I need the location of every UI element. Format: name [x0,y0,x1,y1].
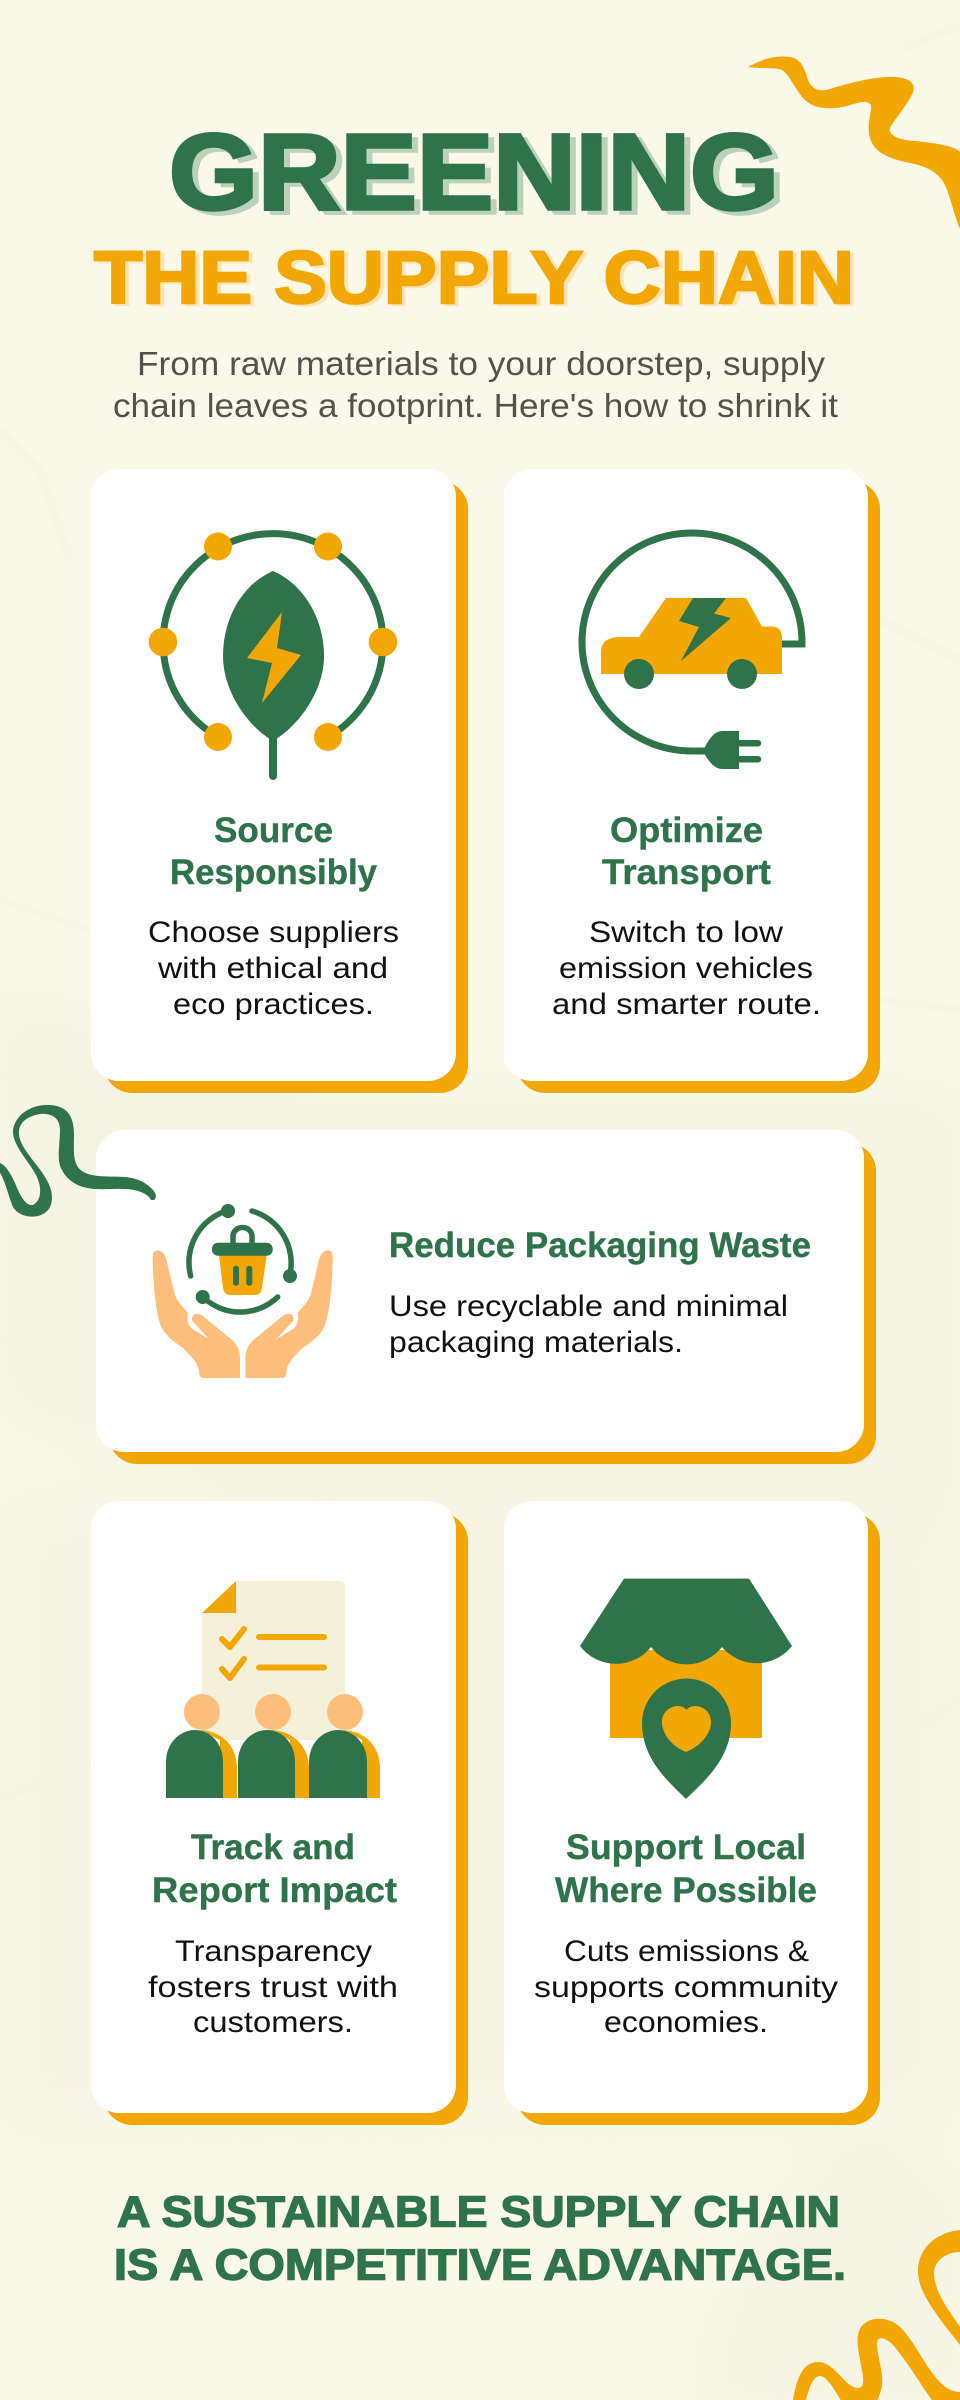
heading: source responsibly: Source [214,811,333,850]
text: support local: supports community [534,1971,838,2004]
heading: optimize transport: Transport [602,853,771,892]
text: optimize transport: and smarter route. [552,988,821,1021]
heading: track and report impact: Report Impact [152,1871,397,1910]
text: reduce packaging waste: packaging materials. [389,1326,683,1359]
closing statement: A SUSTAINABLE SUPPLY CHAIN [117,2188,840,2236]
heading: track and report impact: Track and [191,1828,355,1867]
heading: support local [555,1828,817,1910]
icon: hands holding recycling bin [153,1204,333,1378]
squiggle: top right orange [748,57,960,229]
text: support local: Cuts emissions & [564,1935,809,1968]
text: source responsibly: Choose suppliers [148,916,399,949]
text: support local [534,1935,838,2039]
panel: optimize transport [504,469,880,1093]
squiggles: bottom right orange [793,2230,960,2400]
subtitle [113,345,838,424]
heading: source responsibly: Responsibly [170,853,378,892]
title: GREENING [175,115,785,236]
subtitle: From raw materials to your doorstep, supply [137,345,826,382]
title: THE SUPPLY CHAIN [94,236,854,319]
text: optimize transport [552,916,821,1021]
heading: optimize transport [602,811,771,892]
text: source responsibly [148,916,399,1021]
icon: report with people [166,1581,380,1798]
heading: reduce packaging waste: Reduce Packaging Waste [389,1226,811,1265]
text: optimize transport: Switch to low [589,916,783,949]
title: GREENING [169,111,779,232]
text: optimize transport: emission vehicles [559,952,813,985]
text: reduce packaging waste: Use recyclable and minimal [389,1290,788,1323]
text: source responsibly: eco practices. [173,988,374,1021]
heading: optimize transport: Optimize [610,811,763,850]
panel: support local [504,1501,880,2125]
subtitle: chain leaves a footprint. Here's how to shrink it [113,387,838,424]
heading: source responsibly [170,811,378,892]
text: track and report impact: customers. [193,2006,353,2039]
text: source responsibly: with ethical and [157,952,388,985]
title: THE SUPPLY CHAIN [98,238,858,321]
heading: track and report impact [152,1828,397,1910]
heading: support local: Where Possible [555,1871,817,1910]
text: reduce packaging waste [389,1290,788,1359]
text: track and report impact [148,1935,398,2039]
icon: leaf with bolt in ring [149,532,397,780]
icon: shop with location pin [580,1579,792,1799]
closing statement: IS A COMPETITIVE ADVANTAGE. [114,2240,846,2290]
closing statement [114,2188,846,2290]
panel: track and report impact [91,1501,468,2125]
squiggle: left green [0,1105,156,1217]
panel: reduce packaging waste [96,1130,876,1464]
icon: electric car with plug [582,533,802,769]
title [94,111,858,321]
text: support local: economies. [604,2006,768,2039]
text: track and report impact: fosters trust with [148,1971,398,2004]
panel: source responsibly [91,469,468,1093]
heading: support local: Support Local [566,1828,806,1867]
text: track and report impact: Transparency [175,1935,372,1968]
